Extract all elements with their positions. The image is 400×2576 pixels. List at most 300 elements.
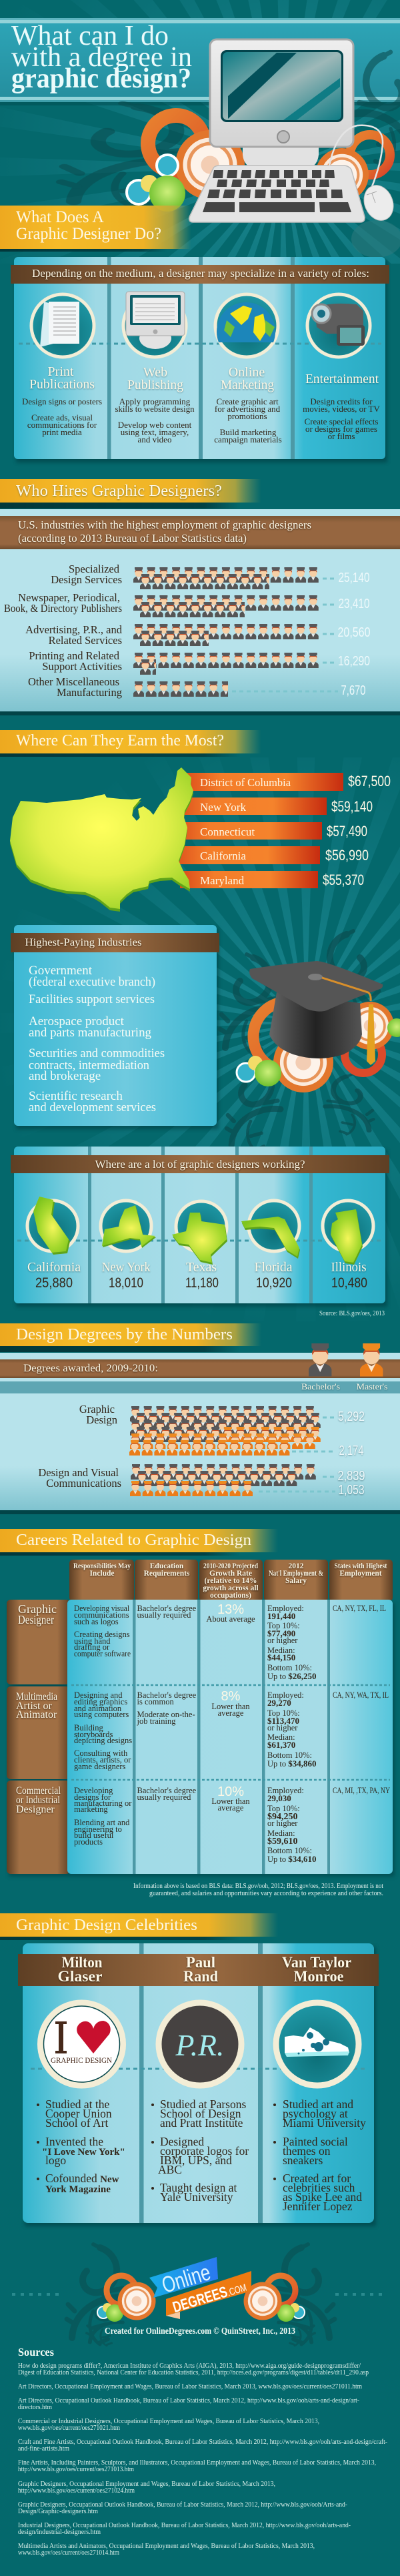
row: design and visual communications: Design and Visual	[38, 1466, 119, 1479]
earnings bars by state	[170, 773, 391, 888]
bar: Connecticut: Connecticut	[200, 826, 255, 838]
panel: designer roles	[11, 257, 389, 462]
title	[11, 21, 192, 94]
bar: Maryland: $55,370	[323, 872, 364, 888]
degrees bar: Degrees awarded, 2009-2010:	[23, 1363, 158, 1374]
row: design and visual communications	[38, 1464, 365, 1498]
source note: Source: BLS.gov/oes, 2013	[319, 1310, 385, 1317]
Paul Rand facts: IBM, UPS, and	[160, 2154, 232, 2167]
title: What can I do	[11, 21, 169, 51]
legend: master's	[356, 1343, 388, 1391]
monitor stand	[243, 145, 319, 170]
legend: bachelor's: Bachelor's	[301, 1381, 340, 1391]
row: commercial or industrial designer	[16, 1785, 390, 1864]
row: graphic design: Graphic	[79, 1403, 115, 1415]
row: graphic designer: Graphic	[18, 1602, 57, 1616]
table column headers: occupations)	[210, 1592, 251, 1600]
mortarboard	[249, 961, 383, 1012]
row: graphic designer: About average	[206, 1614, 255, 1624]
bar: California: California	[200, 850, 246, 862]
role: web publishing: Develop web content	[118, 420, 192, 430]
row: newspaper and book publishers: 23,410	[339, 597, 369, 611]
orange ring right	[350, 135, 390, 175]
row: commercial or industrial designer: average	[218, 1803, 244, 1813]
row: commercial or industrial designer: engineering to	[74, 1825, 122, 1834]
OnlineDegrees logo: DEGREES.COM	[171, 2277, 248, 2316]
role: online marketing: Online	[229, 365, 265, 380]
Van Taylor Monroe facts: themes on	[283, 2144, 331, 2158]
sources list: Graphic Designers, Occupational Employment and Wages, Bureau of Labor Statistics, March 2013,	[18, 2481, 275, 2488]
table column headers: (relative to 14%	[205, 1577, 257, 1585]
row: graphic designer: Bachelor's degree	[137, 1604, 197, 1613]
state: Texas	[172, 1201, 227, 1291]
Paul Rand facts: School of Design	[160, 2107, 241, 2120]
monitor	[210, 39, 353, 147]
careers table	[7, 1560, 395, 1877]
legend: master's: Master's	[356, 1381, 388, 1391]
row: commercial or industrial designer: marketing	[74, 1805, 108, 1814]
industries list: Scientific research	[29, 1089, 123, 1103]
legend: bachelor's	[301, 1343, 340, 1391]
sources list: and-fine-artists.htm	[18, 2445, 69, 2453]
icon: painted sneaker	[276, 2003, 359, 2085]
row: graphic designer: Designer	[18, 1613, 54, 1626]
small circle trio	[127, 155, 185, 212]
table column headers: Education	[150, 1562, 184, 1570]
state: Illinois	[323, 1201, 373, 1291]
row: commercial or industrial designer: Top 10%:	[267, 1804, 300, 1813]
icon: video camera	[307, 294, 370, 357]
row: graphic design: 5,292	[338, 1409, 365, 1424]
keyboard	[189, 166, 365, 222]
row: commercial or industrial designer: $94,250	[267, 1812, 297, 1822]
sources list: Graphic Designers, Occupational Outlook Handbook, Bureau of Labor Statistics, March 2012, http://www.bls.gov/ooh/Arts-and-	[18, 2501, 347, 2509]
row: multimedia artist or animator: game designers	[74, 1762, 126, 1771]
cable	[329, 125, 383, 188]
row: graphic designer: Creating designs	[74, 1630, 130, 1639]
Paul Rand facts	[151, 2098, 249, 2204]
role: entertainment: Design credits for	[310, 396, 373, 406]
bar: Maryland: Maryland	[200, 874, 245, 887]
row: multimedia artist or animator: 8%	[221, 1689, 241, 1704]
row: commercial or industrial designer: 29,030	[267, 1793, 291, 1803]
industries list	[29, 964, 165, 1114]
industries list: and parts manufacturing	[29, 1026, 151, 1040]
icon: printed pages	[31, 294, 94, 357]
Paul Rand facts: Designed	[160, 2135, 204, 2148]
heading bar: Where are a lot of graphic designers working?	[95, 1158, 305, 1171]
computer artwork	[127, 39, 399, 225]
orange ring left	[148, 115, 204, 172]
row: commercial or industrial designer: 10%	[217, 1785, 244, 1799]
Paul Rand facts: Studied at Parsons	[160, 2098, 246, 2111]
sources list: http://www.bls.gov/oes/current/oes271024.htm	[18, 2487, 135, 2495]
footer swirls	[67, 2244, 335, 2346]
row: graphic designer: computer software	[74, 1649, 131, 1658]
row: multimedia artist or animator: Consulting with	[74, 1748, 128, 1758]
industries heading bar	[0, 516, 400, 549]
section banner: Design Degrees by the Numbers: Design Degrees by the Numbers	[16, 1326, 233, 1343]
sources list: How do design programs differ?, American Institute of Graphics Arts (AIGA), 2013, http://www.aiga.org/guide-designprogramsdiffer/	[18, 2362, 361, 2370]
state: California	[27, 1197, 81, 1291]
table column headers: Nat'l Employment &	[269, 1570, 323, 1578]
state: California: California	[27, 1260, 81, 1275]
row: commercial or industrial designer: or higher	[267, 1819, 298, 1828]
row: graphic designer: Up to $26,250	[267, 1671, 316, 1681]
row: multimedia artist or animator: Bachelor's degree	[137, 1690, 197, 1700]
Paul Rand facts: corporate logos for	[160, 2144, 249, 2158]
table column headers: Growth Rate	[209, 1570, 252, 1578]
Van Taylor Monroe facts: psychology at	[283, 2107, 348, 2120]
panel: design celebrities	[18, 1943, 379, 2226]
row: newspaper and book publishers: Book, & Directory Publishers	[4, 602, 122, 615]
table column headers: 2012	[288, 1562, 304, 1570]
row: multimedia artist or animator: $61,370	[267, 1740, 295, 1750]
state: Illinois: Illinois	[331, 1260, 367, 1275]
role: print publications	[22, 364, 102, 437]
icon: I love graphic design: GRAPHIC DESIGN	[51, 2057, 113, 2065]
row: multimedia artist or animator: Lower than	[211, 1702, 250, 1711]
section banner: Careers Related to Graphic Design	[0, 1529, 278, 1556]
sources heading: Sources	[18, 2346, 54, 2358]
Milton Glaser facts: York Magazine	[45, 2184, 111, 2195]
row: multimedia artist or animator: Median:	[267, 1732, 295, 1742]
Van Taylor Monroe facts: Jennifer Lopez	[283, 2200, 353, 2213]
row: advertising and PR: Advertising, P.R., and	[25, 623, 123, 636]
row: commercial or industrial designer: or Industrial	[16, 1795, 60, 1806]
degrees bar	[0, 1359, 400, 1393]
role: entertainment: or designs for games	[305, 424, 377, 434]
Milton Glaser facts: logo	[45, 2154, 66, 2167]
row: multimedia artist or animator: average	[218, 1708, 244, 1718]
table column headers: Include	[89, 1570, 115, 1578]
role: print publications: Create ads, visual	[31, 412, 93, 422]
row: multimedia artist or animator: Building	[74, 1723, 104, 1732]
row: commercial or industrial designer: Up to $34,610	[267, 1854, 316, 1864]
row: graphic design: Design	[86, 1413, 117, 1426]
row: specialized design services: Specialized	[69, 563, 120, 575]
table column headers: Requirements	[144, 1570, 190, 1578]
section banner: What Does A Graphic Designer Do?	[0, 206, 191, 252]
bar: District of Columbia: District of Columbia	[200, 776, 291, 789]
bar: California	[170, 846, 369, 864]
right ornament	[244, 2276, 305, 2322]
row: graphic designer: Median:	[267, 1646, 295, 1655]
bar: Maryland	[180, 871, 364, 888]
lower sunburst rays	[0, 391, 400, 1655]
row: multimedia artist or animator: 29,270	[267, 1698, 291, 1708]
sources list: www.bls.gov/oes/current/oes271014.htm	[18, 2549, 119, 2557]
industries list: Government	[29, 964, 93, 978]
row: commercial or industrial designer: Employed:	[267, 1786, 304, 1795]
row: multimedia artist or animator: editing graphics	[74, 1697, 127, 1706]
icon: monitor web	[123, 292, 186, 357]
roles heading bar: Depending on the medium, a designer may specialize in a variety of roles:	[32, 267, 369, 280]
role: online marketing: Marketing	[221, 378, 274, 392]
row: graphic designer: $44,150	[267, 1652, 295, 1662]
title: with a degree in	[11, 42, 192, 73]
role: online marketing: Build marketing	[220, 427, 277, 437]
section banner: What Does A Graphic Designer Do?: Graphic Designer Do?	[16, 225, 161, 243]
row: design and visual communications: 1,053	[339, 1483, 364, 1498]
Milton Glaser facts: Cofounded New	[45, 2172, 119, 2185]
Van Taylor Monroe facts: as Spike Lee and	[283, 2190, 362, 2204]
concentric circle right	[315, 148, 369, 202]
heading bar	[11, 1155, 389, 1173]
row: graphic designer	[18, 1602, 386, 1681]
names bar	[18, 1954, 379, 1986]
row: commercial or industrial designer: Designer	[16, 1804, 55, 1815]
Paul Rand facts: Taught design at	[160, 2181, 237, 2194]
row: commercial or industrial designer: products	[74, 1837, 103, 1847]
role: web publishing: Web	[143, 365, 167, 380]
row: commercial or industrial designer: designs for	[74, 1793, 111, 1802]
sources list: directors.htm	[18, 2404, 52, 2411]
row: multimedia artist or animator: storyboards	[74, 1730, 113, 1739]
industries bar	[11, 933, 219, 952]
OnlineDegrees logo: Online	[159, 2260, 213, 2298]
row: commercial or industrial designer: $59,610	[267, 1837, 297, 1847]
role: web publishing: and video	[138, 434, 171, 444]
row: graphic designer: or higher	[267, 1636, 298, 1645]
industries bar: Highest-Paying Industries	[25, 937, 141, 948]
row: multimedia artist or animator: Bottom 10%:	[267, 1750, 312, 1760]
row: graphic design: 2,174	[339, 1443, 364, 1458]
row: design and visual communications: 2,839	[337, 1469, 365, 1484]
section banner: Where Can They Earn the Most?: Where Can They Earn the Most?	[16, 732, 224, 749]
section banner: Careers Related to Graphic Design: Careers Related to Graphic Design	[16, 1532, 251, 1549]
industries list: (federal executive branch)	[29, 975, 155, 989]
panel: highest-paying industries	[11, 925, 219, 1129]
role: web publishing: Apply programming	[119, 396, 191, 406]
role: web publishing: skills to website design	[115, 404, 195, 414]
rings	[237, 1002, 400, 1092]
row: commercial or industrial designer: Bachelor's degree	[137, 1786, 197, 1795]
row: graphic design	[79, 1403, 365, 1458]
Paul Rand facts: ABC	[158, 2163, 182, 2176]
icon: P.R. monogram	[159, 2003, 241, 2085]
row: graphic designer: $77,490	[267, 1628, 295, 1638]
row: commercial or industrial designer: Bottom 10%:	[267, 1846, 312, 1855]
sources list: Art Directors, Occupational Outlook Handbook, Bureau of Labor Statistics, March 2012, http://www.bls.gov/ooh/arts-and-design/art-	[18, 2397, 359, 2404]
row: multimedia artist or animator: job training	[136, 1716, 176, 1726]
sources list: http://www.bls.gov/oes/current/oes271013.htm	[18, 2466, 134, 2473]
row: multimedia artist or animator: using computers	[74, 1710, 129, 1719]
cap skull	[269, 992, 362, 1058]
state: Florida: Florida	[255, 1260, 293, 1275]
sources list: Multimedia Artists and Animators, Occupational Employment and Wages, Bureau of Labor Statistics, March 2013,	[18, 2543, 315, 2550]
header sunburst rays	[43, 0, 400, 264]
industries heading bar: U.S. industries with the highest employment of graphic designers	[18, 519, 311, 531]
bar: New York	[173, 797, 373, 815]
section banner: Graphic Design Celebrities	[0, 1913, 278, 1940]
names bar: Glaser	[57, 1968, 103, 1985]
row: multimedia artist or animator	[16, 1689, 389, 1771]
row: commercial or industrial designer: usually required	[137, 1793, 191, 1802]
table body background	[7, 1600, 395, 1877]
row: multimedia artist or animator: depicting designs	[74, 1736, 132, 1745]
row: multimedia artist or animator: $113,470	[267, 1716, 299, 1726]
Milton Glaser facts: Invented the	[45, 2135, 103, 2148]
role: print publications: communications for	[27, 420, 97, 430]
row: commercial or industrial designer: Commercial	[16, 1785, 61, 1797]
role: print publications: Publications	[29, 377, 95, 392]
industries list: Aerospace product	[29, 1014, 125, 1028]
row: multimedia artist or animator: Designing and	[74, 1690, 123, 1700]
role: online marketing: Create graphic art	[216, 396, 279, 406]
table column headers: Employment	[339, 1570, 382, 1578]
state: New York: New York	[101, 1260, 151, 1275]
row: newspaper and book publishers	[4, 591, 369, 617]
role: web publishing	[115, 365, 195, 444]
table column headers: 2010-2020 Projected	[203, 1562, 258, 1570]
row: graphic designer: using hand	[74, 1636, 111, 1646]
sources list: www.bls.gov/oes/current/oes271021.htm	[18, 2425, 120, 2432]
row: graphic designer: drafting or	[74, 1642, 110, 1652]
role: entertainment	[303, 372, 380, 441]
left ornament	[97, 2276, 156, 2322]
names bar: Paul	[186, 1954, 215, 1971]
bar: Connecticut: $57,490	[327, 823, 367, 840]
row: multimedia artist or animator: Artist or	[16, 1700, 52, 1712]
row: commercial or industrial designer: Developing	[74, 1786, 113, 1795]
names bar: Van Taylor	[282, 1954, 351, 1971]
Van Taylor Monroe facts	[273, 2098, 366, 2213]
sources list: Design/Graphic-designers.htm	[18, 2508, 98, 2515]
section banner: Who Hires Graphic Designers?	[0, 479, 261, 509]
Milton Glaser facts	[37, 2098, 125, 2195]
row: specialized design services: Design Services	[51, 573, 122, 586]
Milton Glaser facts: Studied at the	[45, 2098, 109, 2111]
section banner: Design Degrees by the Numbers	[0, 1323, 261, 1352]
Paul Rand facts: and Pratt Institute	[160, 2116, 243, 2130]
header band	[0, 18, 400, 105]
Van Taylor Monroe facts: Miami University	[283, 2116, 366, 2130]
state: California: 25,880	[35, 1275, 73, 1291]
row: graphic designer: 191,440	[267, 1611, 295, 1621]
industries list: and development services	[29, 1100, 156, 1114]
row: specialized design services	[51, 563, 369, 589]
industries heading bar: (according to 2013 Bureau of Labor Statistics data)	[18, 532, 247, 545]
credit line: Created for OnlineDegrees.com © QuinStreet, Inc., 2013	[105, 2326, 295, 2336]
row: miscellaneous manufacturing: Other Miscellaneous	[28, 675, 119, 688]
table column headers: States with Highest	[335, 1562, 387, 1570]
role: print publications: Design signs or posters	[22, 396, 102, 406]
table column headers: Responsibilities May	[73, 1562, 131, 1570]
row: graphic designer: Bottom 10%:	[267, 1663, 312, 1672]
row: graphic designer: Top 10%:	[267, 1621, 300, 1630]
footer artwork with logo	[12, 2244, 387, 2346]
row: advertising and PR: Related Services	[49, 634, 122, 647]
row: printing: Support Activities	[42, 660, 122, 673]
row: miscellaneous manufacturing: 7,670	[341, 683, 365, 698]
row: graphic designer: Developing visual	[74, 1604, 129, 1613]
section banner: Who Hires Graphic Designers?: Who Hires Graphic Designers?	[16, 482, 222, 500]
row: design and visual communications: Communications	[46, 1477, 121, 1490]
table footnote	[133, 1883, 383, 1897]
bar: District of Columbia: $67,500	[348, 773, 391, 789]
names bar: Monroe	[293, 1968, 344, 1985]
row: printing	[29, 649, 370, 675]
role: online marketing: promotions	[227, 411, 267, 421]
row: miscellaneous manufacturing	[28, 677, 365, 698]
row: multimedia artist or animator: clients, artists, or	[74, 1755, 131, 1764]
row: printing: 16,290	[338, 654, 370, 669]
role: entertainment: or films	[328, 431, 355, 441]
state: Florida: 10,920	[256, 1275, 292, 1291]
row: commercial or industrial designer: Median:	[267, 1829, 295, 1838]
section banner: Where Can They Earn the Most?	[0, 730, 261, 757]
row: multimedia artist or animator: or higher	[267, 1723, 298, 1732]
role: entertainment: Entertainment	[305, 372, 379, 386]
sources list: Art Directors, Occupational Employment and Wages, Bureau of Labor Statistics, March 2013, www.bls.gov/oes/current/oes271011.htm	[18, 2383, 362, 2390]
row: advertising and PR	[25, 623, 371, 647]
icon: I love graphic design	[40, 2003, 123, 2085]
table column headers: growth across all	[203, 1584, 259, 1592]
row: multimedia artist or animator: Top 10%:	[267, 1708, 300, 1718]
state: Texas: 11,180	[185, 1275, 219, 1291]
bar: District of Columbia	[180, 773, 391, 791]
dividers	[88, 1147, 313, 1303]
role: online marketing: campaign materials	[214, 434, 282, 444]
icon: globe	[215, 294, 278, 361]
bar: California: $56,990	[325, 847, 369, 864]
row: multimedia artist or animator: is common	[137, 1697, 174, 1706]
Van Taylor Monroe facts: sneakers	[283, 2154, 323, 2167]
swirls	[220, 931, 380, 1151]
row: specialized design services: 25,140	[339, 571, 369, 585]
row: commercial or industrial designer: Lower than	[211, 1797, 250, 1806]
table column headers: Salary	[285, 1577, 307, 1585]
row: commercial or industrial designer: Blending art and	[74, 1818, 130, 1827]
section banner: What Does A Graphic Designer Do?: What Does A	[16, 208, 104, 226]
role: online marketing: for advertising and	[215, 404, 281, 414]
Milton Glaser facts: Cooper Union	[45, 2107, 112, 2120]
industries list: and brokerage	[29, 1069, 101, 1083]
panel: where designers work	[11, 1147, 389, 1307]
roles heading bar	[11, 265, 389, 284]
row: advertising and PR: 20,560	[337, 625, 371, 640]
state: Texas: Texas	[186, 1260, 217, 1275]
Paul Rand facts: Yale University	[160, 2190, 233, 2204]
row: graphic designer: communications	[74, 1610, 129, 1620]
sources list: Fine Artists, Including Painters, Sculptors, and Illustrators, Occupational Employment and Wages, Bureau of Labor Statistics, March 2013,	[18, 2459, 376, 2467]
OnlineDegrees logo	[149, 2257, 251, 2319]
row: graphic designer: such as logos	[74, 1617, 119, 1626]
icon: P.R. monogram: P.R.	[175, 2028, 224, 2062]
table column headers	[69, 1560, 393, 1601]
row: graphic designer: usually required	[137, 1610, 191, 1620]
US map	[10, 767, 193, 912]
role: entertainment: Create special effects	[305, 416, 378, 426]
industries list: Securities and commodities	[29, 1046, 165, 1060]
row: multimedia artist or animator: Multimedia	[16, 1691, 57, 1702]
tassel	[308, 974, 375, 1065]
row: graphic designer: Employed:	[267, 1604, 304, 1613]
decorative swirls behind computer	[61, 52, 400, 258]
row: miscellaneous manufacturing: Manufacturing	[57, 686, 122, 699]
industries list: Facilities support services	[29, 992, 155, 1006]
state: New York: 18,010	[109, 1275, 143, 1291]
state: Illinois: 10,480	[331, 1275, 367, 1291]
row: multimedia artist or animator: Moderate on-the-	[137, 1710, 195, 1719]
sources list	[18, 2362, 387, 2557]
table footnote: guaranteed, and salaries and opportunities vary according to experience and other factors.	[149, 1890, 383, 1897]
state: Florida	[241, 1201, 300, 1291]
role: print publications: print media	[42, 427, 82, 437]
bar: New York: $59,140	[331, 798, 373, 815]
section banner: Graphic Design Celebrities: Graphic Design Celebrities	[16, 1917, 197, 1934]
